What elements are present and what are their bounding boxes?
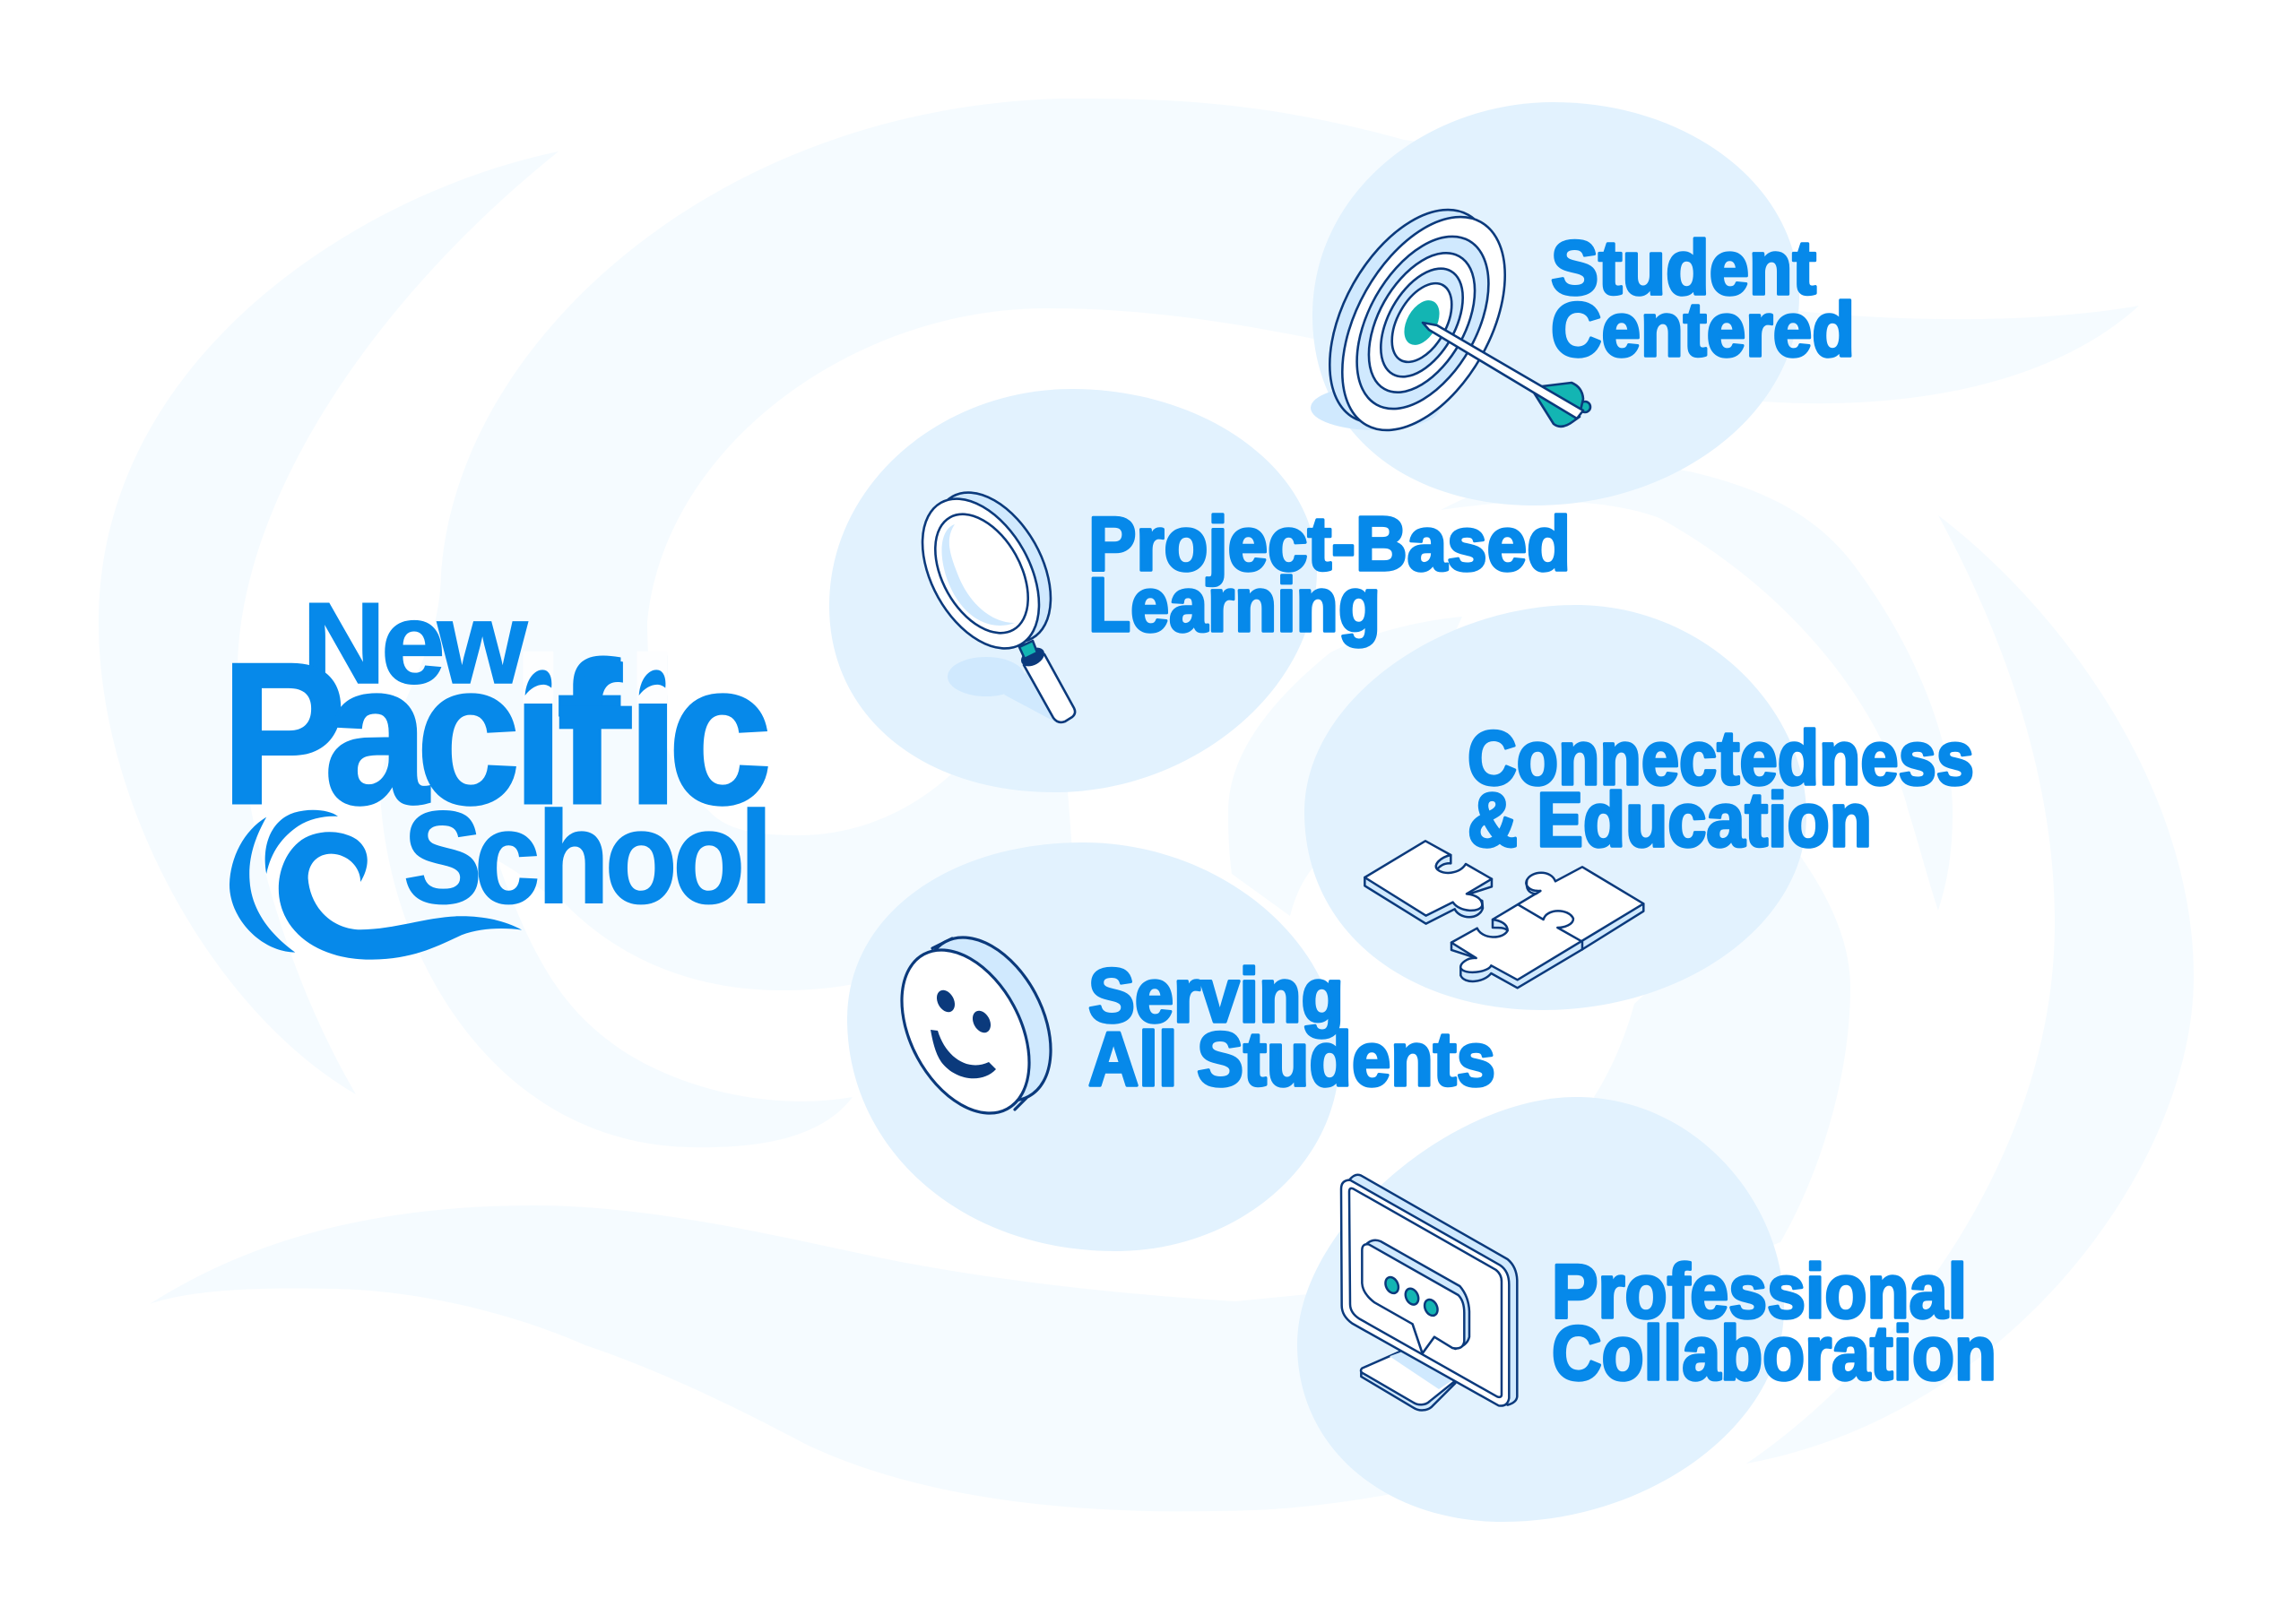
- label: Learning: [1088, 563, 1381, 648]
- panel: Serving All Students: [847, 842, 1495, 1251]
- label: & Education: [1468, 778, 1872, 863]
- label: [1551, 226, 1855, 373]
- logo word: Pacific: Pacific: [221, 621, 772, 847]
- label: Collaboration: [1552, 1311, 1996, 1396]
- icon: magnifying glass: [898, 472, 1075, 722]
- blob: [829, 389, 1317, 792]
- background: pale ocean swirl shapes: [99, 99, 2194, 1511]
- logo: New Pacific School: [221, 579, 773, 960]
- blob: [1304, 605, 1806, 1010]
- label: Serving: [1088, 954, 1344, 1039]
- logo word: New: New: [302, 579, 528, 708]
- blob: [1312, 102, 1799, 505]
- panel: Professional Collaboration: [1297, 1097, 1996, 1522]
- logo word: School: School: [403, 785, 773, 931]
- label: Connectedness: [1468, 716, 1974, 801]
- icon: puzzle pieces: [1364, 841, 1643, 988]
- label: [1552, 1249, 1996, 1396]
- label: [1088, 954, 1495, 1102]
- label: Professional: [1552, 1249, 1967, 1335]
- icon: monitor with speech bubble: [1341, 1175, 1517, 1410]
- panel: Student Centered: [1296, 102, 1855, 505]
- panel: Connectedness & Education: [1304, 605, 1974, 1010]
- label: Project-Based: [1088, 502, 1571, 587]
- logo wave mark and letter accents: [230, 652, 667, 960]
- blob: [1297, 1097, 1784, 1522]
- label: Student: [1551, 226, 1816, 311]
- blob: [847, 842, 1339, 1251]
- label: Centered: [1551, 288, 1855, 373]
- label: [1088, 502, 1571, 648]
- icon: smiley coin: [876, 916, 1077, 1135]
- label: [1468, 716, 1974, 863]
- label: All Students: [1088, 1017, 1495, 1102]
- icon: target with arrow: [1296, 182, 1590, 458]
- panel: Project-Based Learning: [829, 389, 1571, 792]
